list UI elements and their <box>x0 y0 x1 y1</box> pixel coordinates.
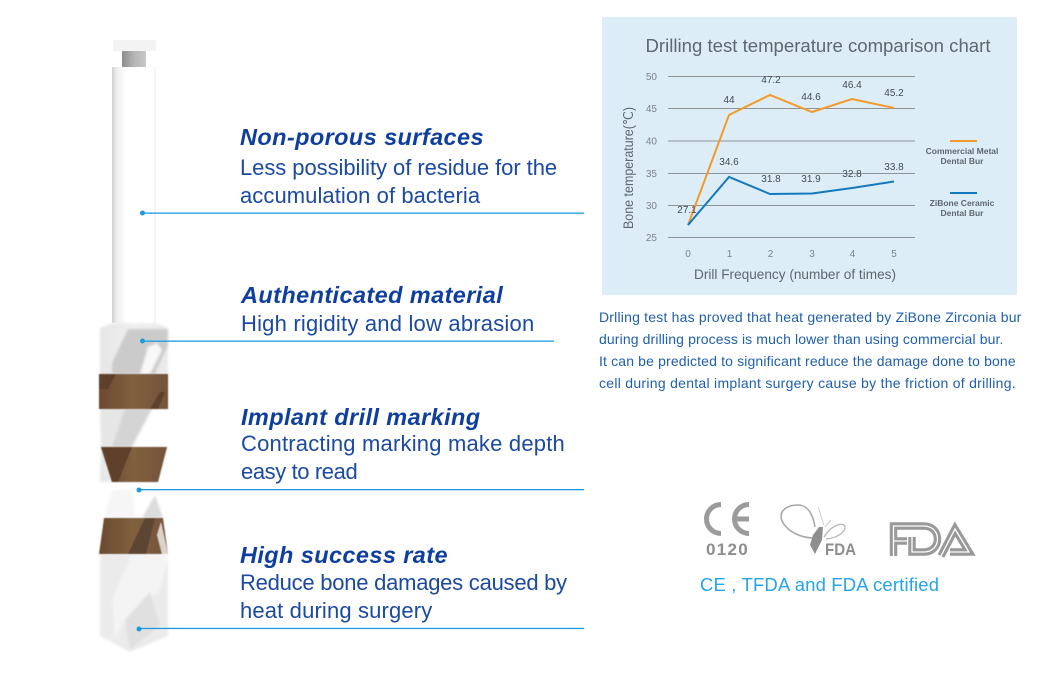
icon: FDA mark <box>890 522 976 558</box>
x axis labels: 5 <box>891 249 897 260</box>
icon: CE 0120 mark <box>704 502 749 558</box>
drill shaft <box>112 67 156 323</box>
y axis labels: 30 <box>646 201 657 212</box>
x axis labels: 0 <box>685 249 691 260</box>
depth mark band 2 <box>101 447 167 482</box>
legend: Dental Bur <box>941 156 984 166</box>
heading: Non-porous surfaces <box>240 124 484 150</box>
data labels: commercial metal: 47.2 <box>761 75 781 86</box>
leader line: high success rate <box>136 626 584 632</box>
y axis labels: 35 <box>646 169 657 180</box>
series: commercial metal bur <box>688 95 894 225</box>
y axis title: Bone temperature(℃) <box>621 107 636 229</box>
x axis labels <box>685 249 897 260</box>
x axis labels: 1 <box>727 249 733 260</box>
panel: temperature comparison chart <box>602 17 1017 295</box>
chart title: Drilling test temperature comparison chart <box>646 36 990 56</box>
legend: Dental Bur <box>941 208 984 218</box>
icon: TFDA butterfly mark <box>780 504 856 559</box>
y axis labels: 40 <box>646 136 657 148</box>
heading: Authenticated material <box>241 282 503 308</box>
data labels: commercial metal: 44.6 <box>801 92 821 103</box>
data labels: ZiBone ceramic: 27.1 <box>677 205 697 216</box>
depth mark band 1 <box>99 374 168 409</box>
series: ZiBone ceramic bur <box>688 177 894 225</box>
chart description paragraph: during drilling process is much lower than using commercial bur. <box>599 331 1004 347</box>
chart description paragraph: cell during dental implant surgery cause by the friction of drilling. <box>599 375 1016 391</box>
x axis labels: 4 <box>850 249 856 260</box>
x axis labels: 2 <box>768 249 774 260</box>
y axis labels: 45 <box>646 104 657 115</box>
description <box>240 570 567 623</box>
heading: High success rate <box>240 542 448 568</box>
leader line: implant drill marking <box>136 488 584 492</box>
data labels: ZiBone ceramic: 32.8 <box>842 169 862 180</box>
feature: non-porous surfaces <box>240 124 557 208</box>
chart description paragraph: It can be predicted to significant reduce the damage done to bone <box>599 353 1016 369</box>
data labels: ZiBone ceramic: 33.8 <box>884 162 904 173</box>
legend <box>926 141 998 218</box>
data labels: ZiBone ceramic: 34.6 <box>719 157 739 168</box>
description: High rigidity and low abrasion <box>241 311 534 336</box>
drill head cap <box>113 40 156 51</box>
data labels: commercial metal: 46.4 <box>842 80 862 91</box>
description <box>240 155 557 208</box>
drill neck <box>122 51 146 67</box>
legend: ZiBone Ceramic <box>930 198 995 208</box>
x axis labels: 3 <box>809 249 815 260</box>
x axis title: Drill Frequency (number of times) <box>694 267 896 282</box>
y axis labels: 25 <box>646 233 657 244</box>
description: Less possibility of residue for the <box>240 155 557 180</box>
drill fluted body <box>100 323 168 652</box>
description: Reduce bone damages caused by <box>240 570 567 595</box>
drill bur illustration <box>98 40 170 652</box>
leader line: non-porous surfaces <box>140 210 584 216</box>
chart description paragraph: Drlling test has proved that heat generated by ZiBone Zirconia bur <box>599 309 1022 325</box>
y axis labels <box>646 72 657 244</box>
data labels: ZiBone ceramic: 31.8 <box>761 174 781 185</box>
chart description paragraph <box>599 309 1022 391</box>
feature: high success rate <box>240 542 567 623</box>
depth mark band 3 <box>99 518 168 554</box>
data labels: ZiBone ceramic: 31.9 <box>801 174 821 185</box>
description: heat during surgery <box>240 598 432 623</box>
y axis labels: 50 <box>646 72 657 83</box>
certification caption: CE , TFDA and FDA certified <box>700 574 939 595</box>
leader line: authenticated material <box>140 338 554 344</box>
data labels: commercial metal: 45.2 <box>884 88 904 99</box>
feature: authenticated material <box>240 282 534 336</box>
description: accumulation of bacteria <box>240 183 480 208</box>
data labels: ZiBone ceramic <box>677 157 904 216</box>
description <box>241 431 565 484</box>
data labels: commercial metal: 44 <box>723 95 735 106</box>
icon: TFDA butterfly mark: FDA <box>825 541 856 559</box>
heading: Implant drill marking <box>241 404 481 430</box>
legend: Commercial Metal <box>926 146 998 156</box>
data labels: commercial metal <box>723 75 904 106</box>
description: easy to read <box>241 459 357 484</box>
description: Contracting marking make depth <box>241 431 565 456</box>
feature: implant drill marking <box>241 404 565 484</box>
